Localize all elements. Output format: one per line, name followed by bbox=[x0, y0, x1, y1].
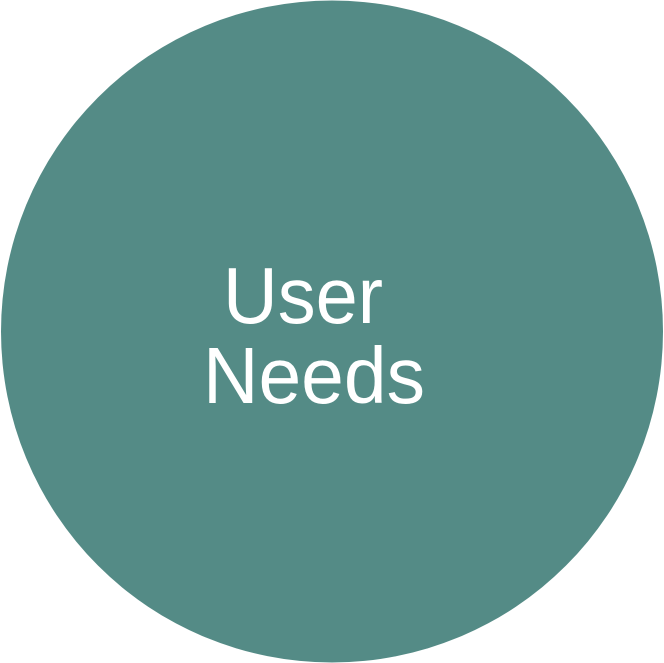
title: User Needs: User bbox=[223, 251, 383, 340]
title: User Needs: Needs bbox=[203, 331, 425, 420]
title: User Needs bbox=[203, 251, 425, 420]
